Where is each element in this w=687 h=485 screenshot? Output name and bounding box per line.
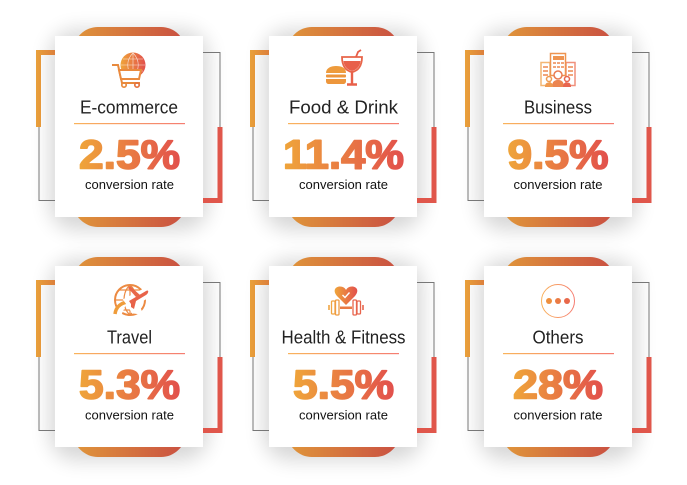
icon: heart and dumbbell xyxy=(329,286,363,315)
heading: Business xyxy=(524,98,592,118)
heading: Travel xyxy=(107,328,152,348)
heading: Others xyxy=(532,328,584,348)
heading: Food & Drink xyxy=(289,98,399,118)
icon: buildings and people xyxy=(541,54,575,87)
stat: 28% xyxy=(513,362,603,408)
caption: conversion rate xyxy=(299,177,388,192)
divider xyxy=(503,123,614,124)
heading: Health & Fitness xyxy=(282,328,406,348)
stat: 5.5% xyxy=(293,362,394,408)
divider xyxy=(288,123,399,124)
icon: burger and drink xyxy=(326,50,362,84)
panel: Business xyxy=(465,27,652,230)
panel: E-commerce xyxy=(36,27,222,230)
panel: Others xyxy=(465,257,652,460)
icon: three dots in circle xyxy=(542,284,574,318)
caption: conversion rate xyxy=(85,177,174,192)
panel: Food & Drink xyxy=(250,27,436,230)
stat: 5.3% xyxy=(79,362,180,408)
divider xyxy=(288,353,399,354)
divider xyxy=(503,353,614,354)
caption: conversion rate xyxy=(85,408,174,422)
caption: conversion rate xyxy=(514,177,602,192)
caption: conversion rate xyxy=(299,408,388,422)
stat: 9.5% xyxy=(508,132,608,178)
panel: Travel xyxy=(36,257,222,460)
stat: 2.5% xyxy=(79,132,180,178)
panel: Health & Fitness xyxy=(250,257,436,460)
divider xyxy=(74,353,185,354)
divider xyxy=(74,123,185,124)
icon: shopping cart with globe xyxy=(112,52,146,87)
heading: E-commerce xyxy=(80,98,178,118)
stat: 11.4% xyxy=(283,132,404,178)
caption: conversion rate xyxy=(514,408,602,422)
icon: globe and airplane xyxy=(112,285,148,318)
